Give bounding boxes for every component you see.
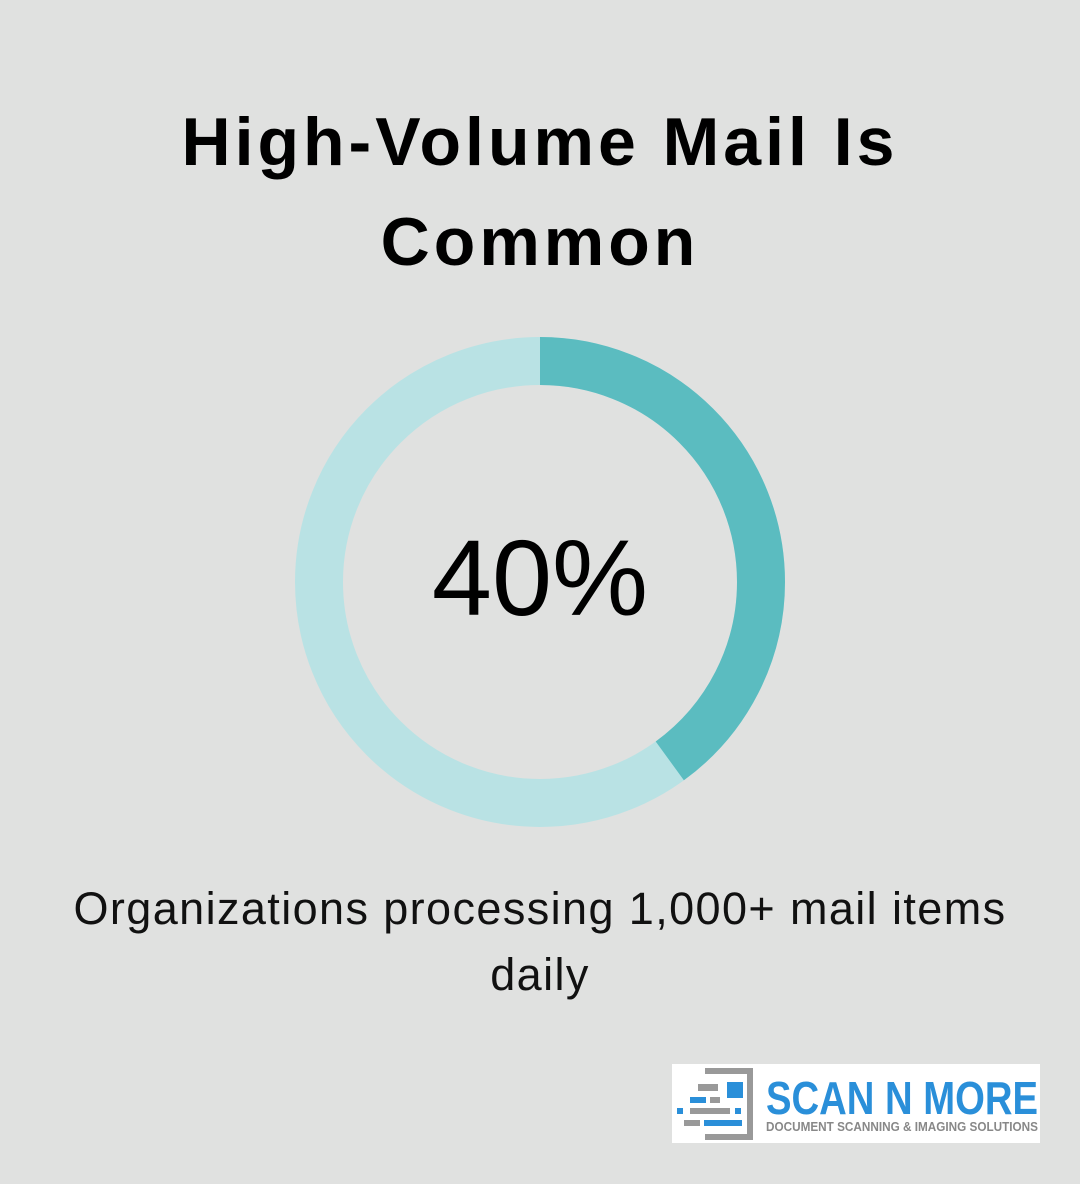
title: Common — [381, 204, 699, 280]
title — [181, 104, 899, 280]
title: High-Volume Mail Is — [181, 104, 899, 180]
description: Organizations processing 1,000+ mail items — [74, 883, 1006, 934]
description: daily — [490, 949, 590, 1000]
donut chart: 40% — [432, 517, 648, 638]
description — [74, 883, 1006, 1000]
logo — [672, 1064, 1040, 1143]
